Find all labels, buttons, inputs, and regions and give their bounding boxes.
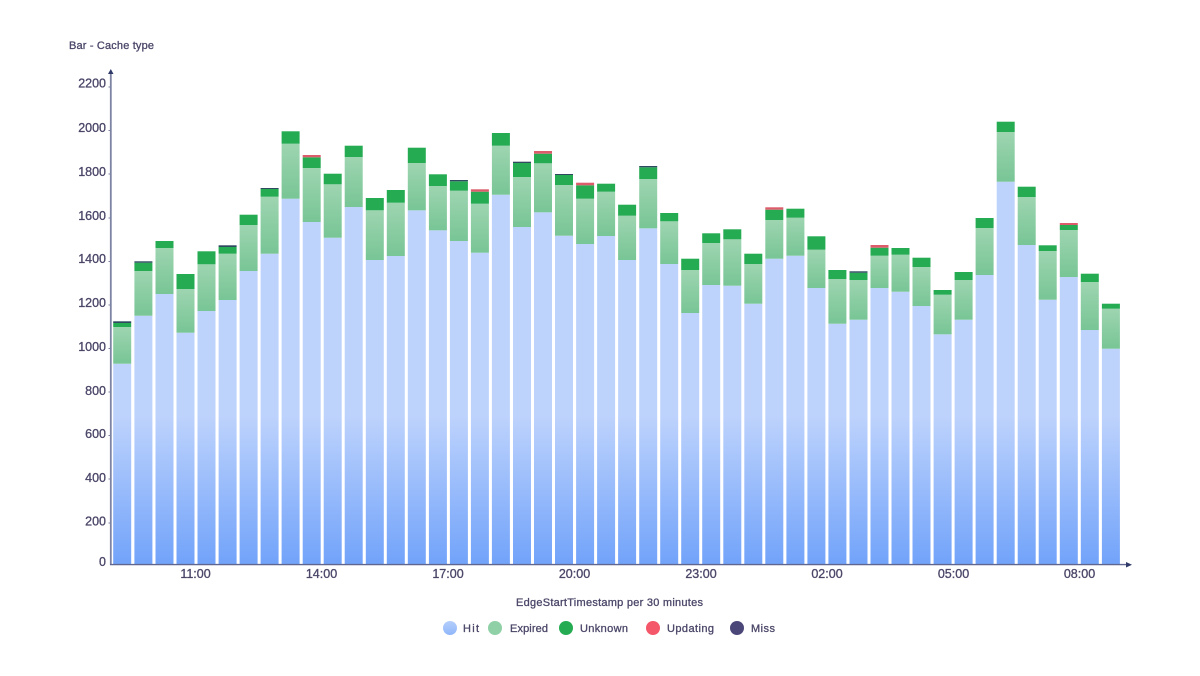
x axis: 17:00 <box>432 567 464 581</box>
y axis: 1000 <box>78 340 106 354</box>
y axis: 600 <box>85 427 106 441</box>
legend: Expired <box>510 623 548 635</box>
y axis: 1200 <box>78 296 106 310</box>
y axis: 1600 <box>78 209 106 223</box>
y axis: 1800 <box>78 165 106 179</box>
x axis: 05:00 <box>938 567 969 581</box>
legend: Miss <box>751 623 776 635</box>
y axis: 0 <box>99 555 106 569</box>
x axis: 14:00 <box>306 567 337 581</box>
y axis <box>78 69 114 569</box>
y axis: 2200 <box>78 76 106 90</box>
x axis <box>110 562 1132 581</box>
y axis: 2000 <box>78 121 106 135</box>
x axis: 20:00 <box>559 567 590 581</box>
y axis: 200 <box>85 514 106 528</box>
legend <box>443 621 776 635</box>
bars <box>113 122 1120 564</box>
x axis: 02:00 <box>811 567 843 581</box>
x axis: 08:00 <box>1064 567 1095 581</box>
y axis: 400 <box>85 471 106 485</box>
title: Bar - Cache type <box>69 40 154 52</box>
x axis: 11:00 <box>180 567 211 581</box>
legend: Unknown <box>580 623 628 635</box>
x axis: 23:00 <box>685 567 717 581</box>
x axis title: EdgeStartTimestamp per 30 minutes <box>516 597 704 609</box>
y axis: 800 <box>85 384 106 398</box>
legend: Hit <box>463 623 479 635</box>
y axis: 1400 <box>78 252 106 266</box>
legend: Updating <box>667 623 714 635</box>
